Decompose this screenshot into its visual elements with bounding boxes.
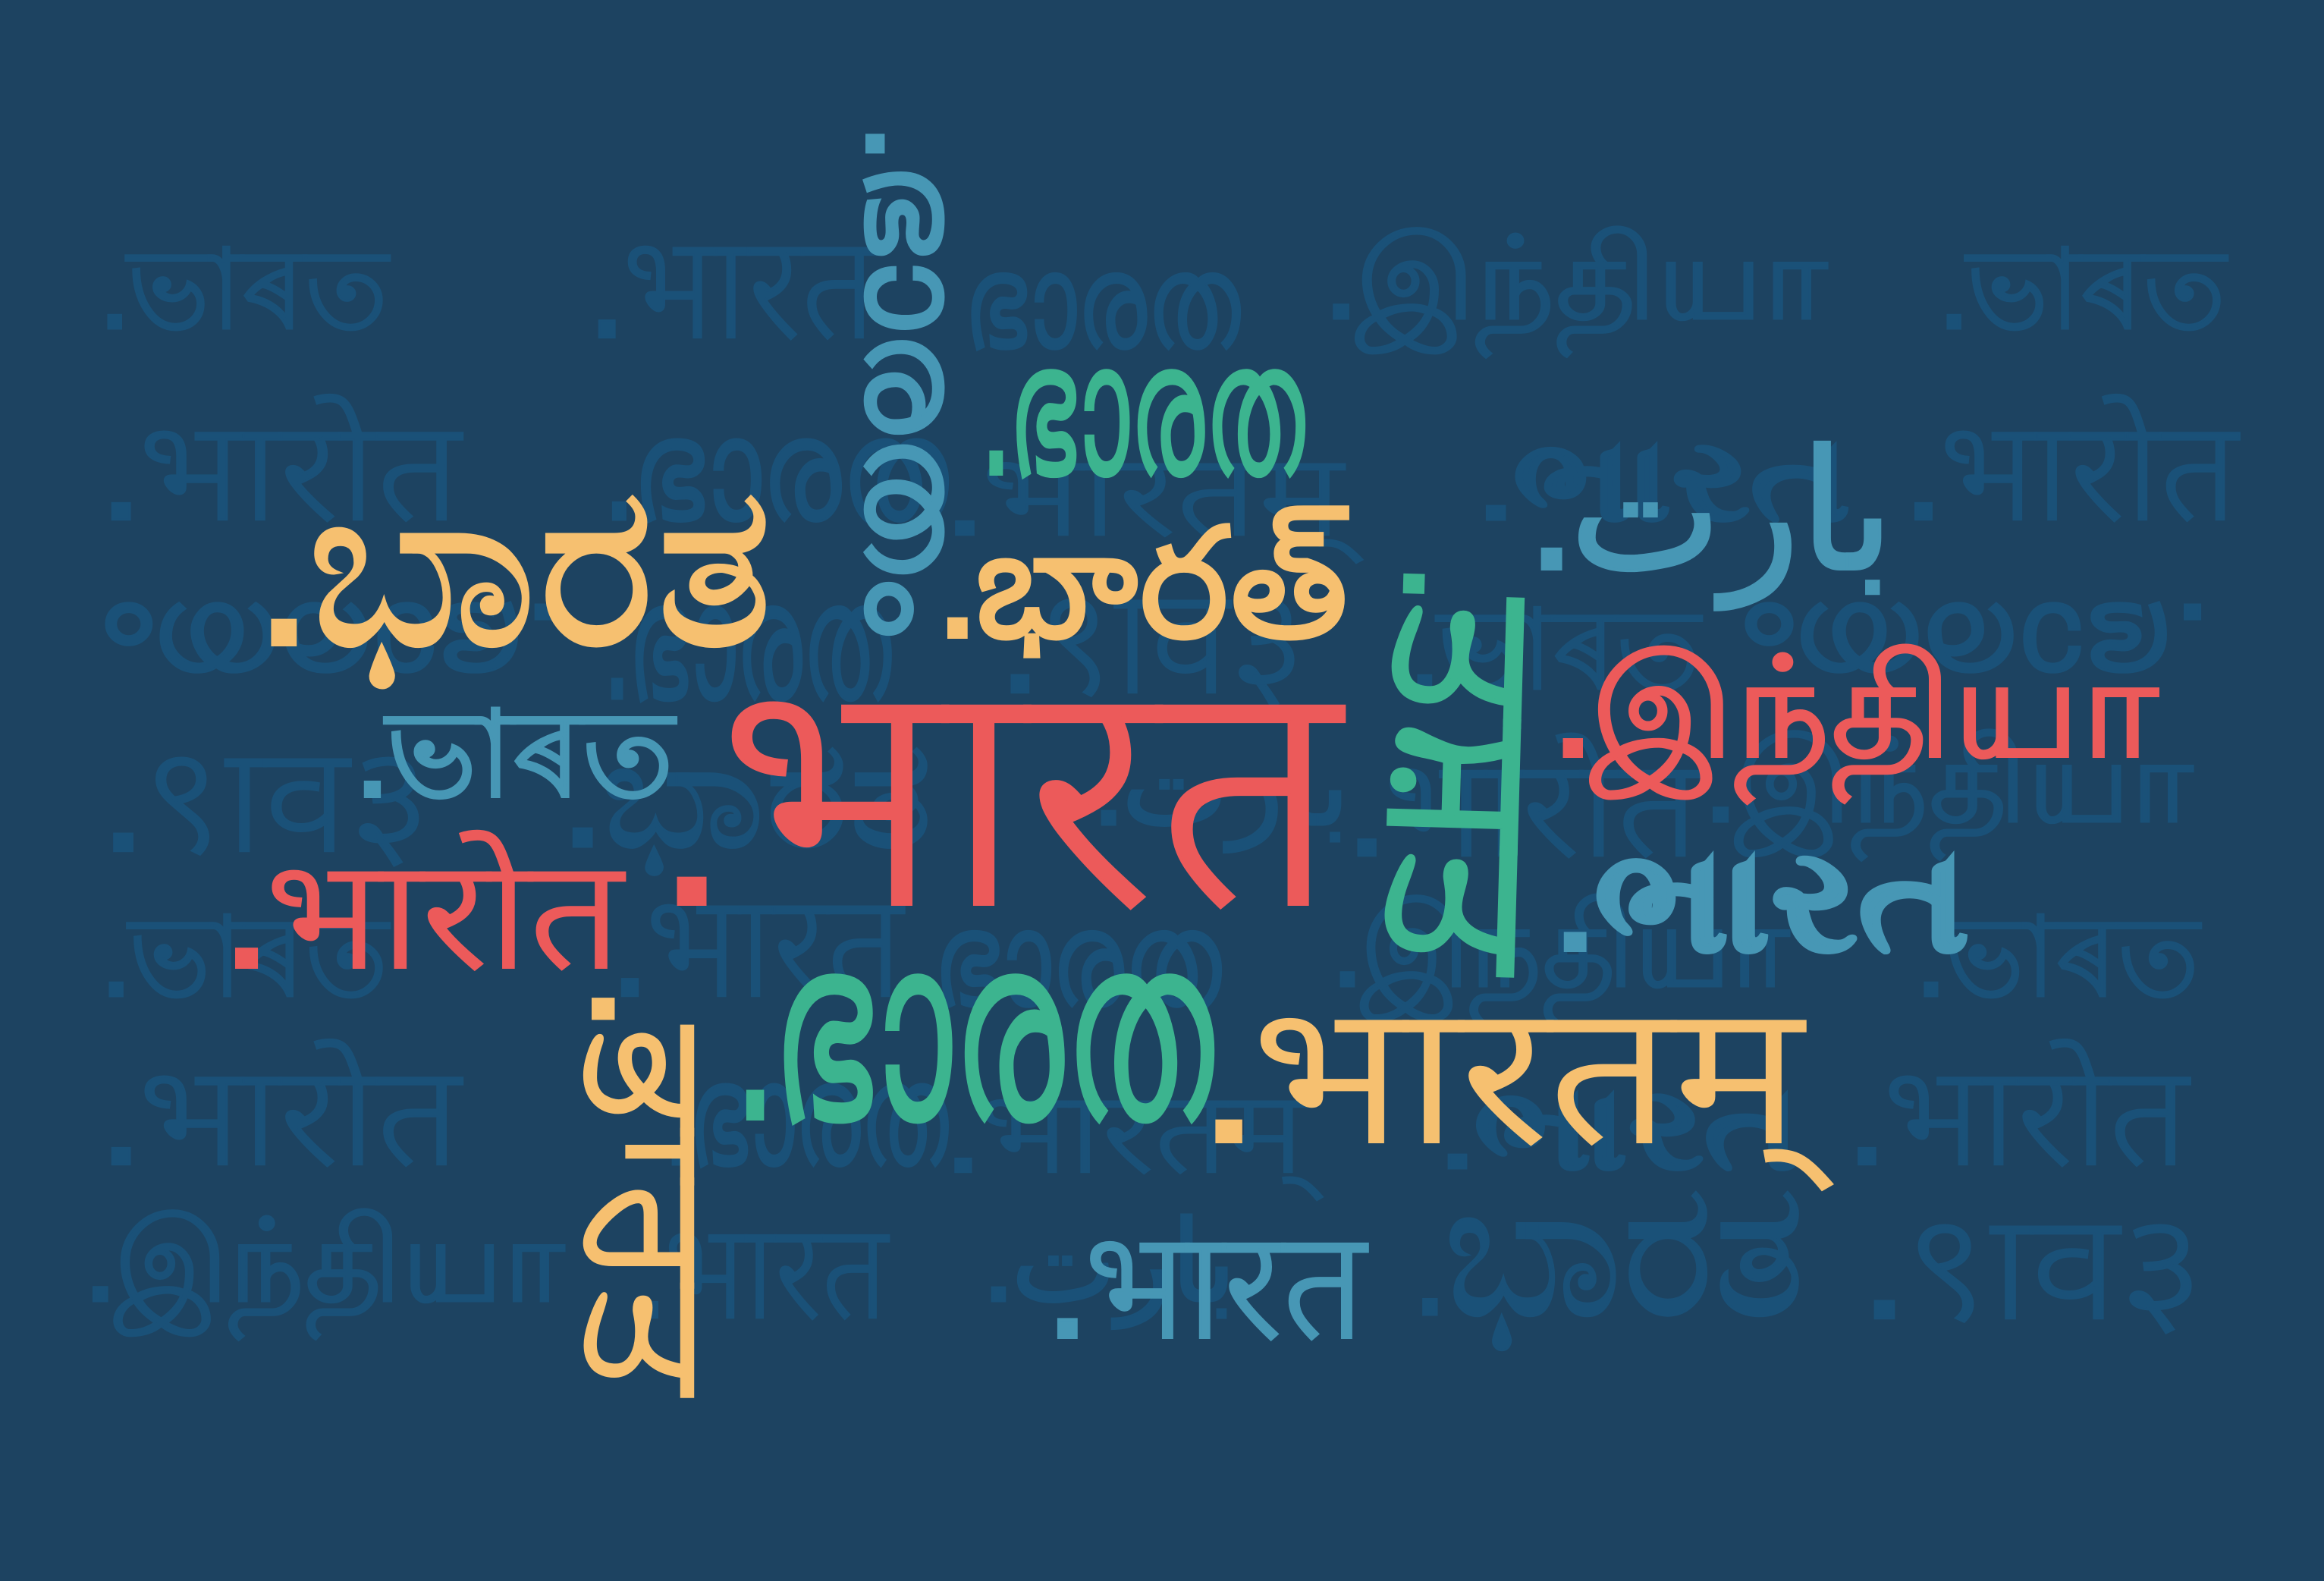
faint background words: .بارت: [1096, 724, 1350, 872]
faint background words: .भारत: [592, 209, 878, 397]
faint background words: .بارت: [986, 1200, 1236, 1348]
word: red Tamil: .இந்தியா: [1556, 631, 2159, 814]
faint background words: .भारोत: [1908, 394, 2240, 577]
faint background words: .ഭാരതം: [1745, 555, 2207, 712]
faint background words: .भारोत: [1350, 734, 1701, 912]
word: yellow Sanskrit: .भारतम्: [1206, 970, 1832, 1221]
faint background words: .९ाव३: [1866, 1186, 2206, 1379]
faint background words: .இந்தியா: [1707, 718, 2194, 869]
word: blue Urdu: .بارت: [1534, 420, 1894, 637]
faint background words: .भारोत: [104, 1039, 463, 1222]
faint background words: .ভাৰত: [104, 896, 390, 1042]
word: large red Hindi: .भारत: [666, 620, 1347, 1035]
faint background words: ഭാരത: [963, 229, 1240, 402]
faint background words: .இந்தியா: [1335, 883, 1790, 1034]
word: vertical Malayalam blue: . ഭാരതം: [811, 127, 988, 635]
faint background words: .இந்தியா: [1327, 215, 1828, 366]
faint background words: .இந்தியா: [87, 1198, 565, 1349]
word: yellow Kannada large: .ಭಾರತ: [262, 440, 774, 739]
faint background words: .भारत: [637, 1199, 889, 1372]
word: green Malayalam small: .ഭാരത: [985, 307, 1305, 550]
faint background words: .ভাৰত: [1919, 896, 2201, 1042]
word: blue Assamese: .ভাৰত: [359, 689, 677, 847]
word: yellow Telugu: .భారత్: [941, 498, 1349, 701]
word: big green Malayalam: .ഭാരത: [740, 888, 1216, 1224]
faint background words: .ಭಾರತ: [565, 711, 933, 909]
faint background words: .ഭാരതം: [105, 555, 557, 712]
word: blue Gujarati: .ભારત: [1556, 822, 1970, 1010]
faint background words: .भारतम्: [948, 1071, 1323, 1219]
faint background words: .भारोत: [1851, 1039, 2191, 1222]
word: vertical yellow Gurmukhi: . ਭਾਰਤ: [524, 990, 744, 1397]
faint background words: .९ाव३: [105, 718, 432, 912]
word: vertical green: .ਤਸ਼ਤ: [1314, 567, 1582, 979]
word: red Konkani: .भारोत: [228, 831, 624, 1029]
faint background words: .भारत: [614, 867, 905, 1055]
faint background words: .ഭാരത: [607, 391, 949, 579]
faint background words: [87, 209, 2240, 1392]
faint background words: .ഭാരത: [667, 1036, 948, 1224]
faint background words: .९ाव३: [1003, 560, 1307, 753]
faint background words: .ভাৰত: [102, 228, 390, 375]
faint background words: .ಭಾರತ: [1417, 1145, 1805, 1392]
faint background words: .ભારત: [1479, 419, 1851, 567]
faint background words: .ভাৰত: [1412, 589, 1702, 735]
faint background words: .भारतम्: [948, 434, 1362, 582]
word: blue Hindi lower: .भारत: [1051, 1203, 1368, 1399]
faint background words: .ભારત: [1441, 1067, 1801, 1215]
faint background words: .ഭാരത: [607, 551, 891, 766]
faint background words: .ভাৰত: [1942, 228, 2228, 375]
faint background words: ഭാരത: [933, 887, 1221, 1060]
faint background words: .भारोत: [104, 394, 463, 577]
